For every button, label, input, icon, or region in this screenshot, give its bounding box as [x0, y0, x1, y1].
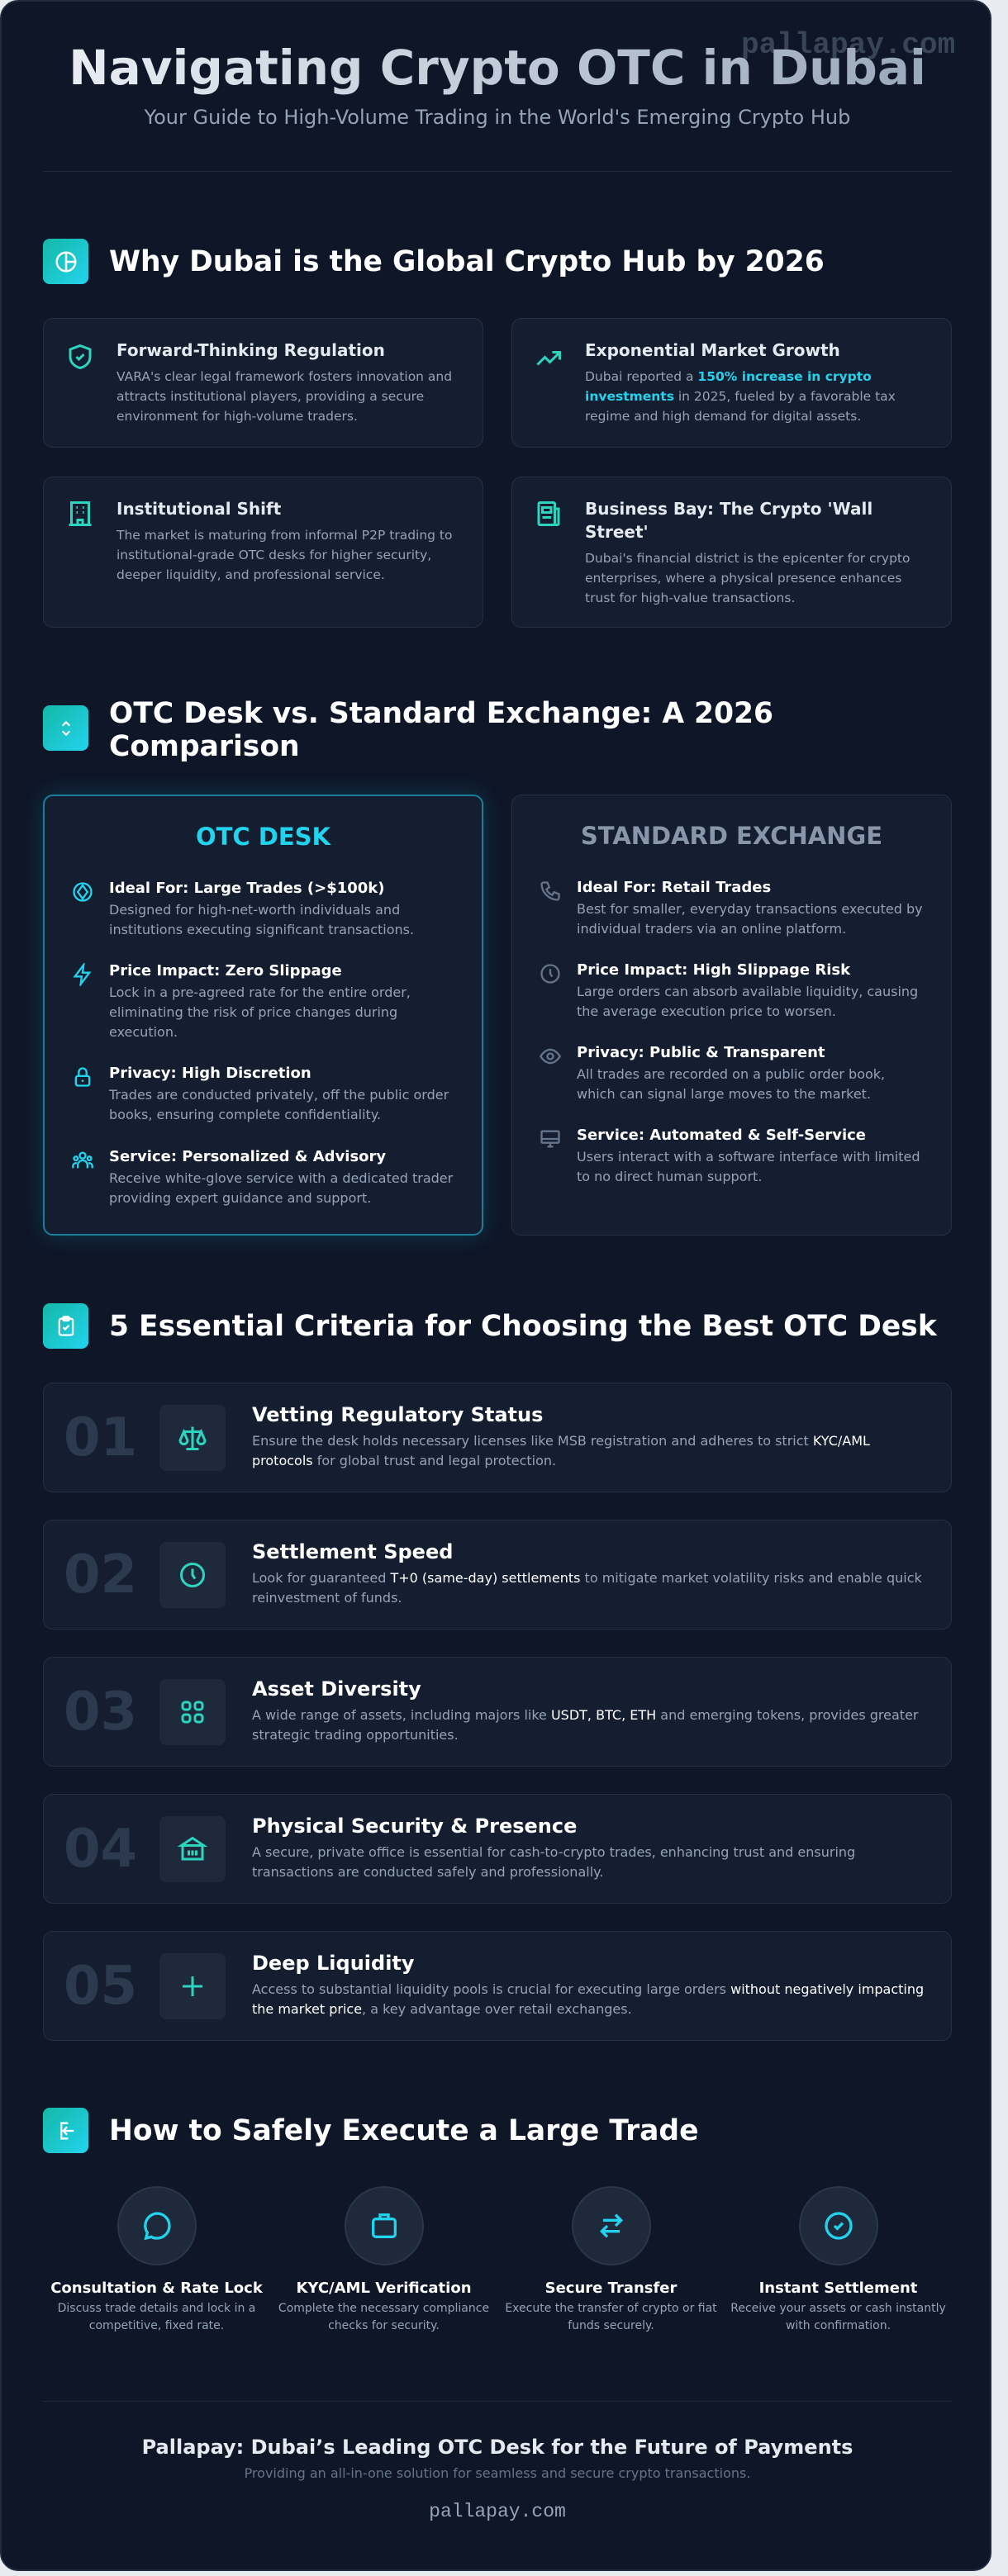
item: price: Price Impact: Zero Slippage — [109, 962, 342, 980]
item: privacy: Privacy: High Discretion — [109, 1065, 311, 1082]
card: institutional: The market is maturing from informal P2P trading to institutional-grade OTC desks for higher security, deeper liquidity, and professional service. — [116, 528, 453, 582]
criterion 01 — [43, 1383, 952, 1492]
section 2 heading: OTC Desk vs. Standard Exchange: A 2026 — [109, 697, 773, 730]
title: Navigating Crypto OTC in Dubai — [69, 40, 926, 96]
section 1 heading: Why Dubai is the Global Crypto Hub by 2026 — [109, 245, 825, 278]
card: institutional — [43, 477, 483, 628]
item: privacy: Privacy: Public & Transparent — [577, 1044, 825, 1061]
panel: standard exchange — [511, 795, 952, 1236]
card: business bay: Business Bay: The Crypto 'Wall Street' — [585, 499, 872, 542]
card: growth: Exponential Market Growth — [585, 340, 840, 360]
step 2: Complete the necessary compliance checks for security. — [278, 2302, 489, 2332]
item: ideal for: Ideal For: Large Trades (>$100k) — [109, 880, 385, 897]
criterion 02: Settlement Speed — [252, 1540, 453, 1563]
criterion 03: Asset Diversity — [252, 1677, 421, 1701]
item: privacy — [74, 1065, 449, 1122]
icon: trend — [537, 351, 561, 365]
icon: login — [43, 2108, 88, 2153]
item: price — [73, 962, 411, 1040]
item: price: Large orders can absorb available liquidity, causing the average execution price to worsen. — [577, 984, 918, 1019]
item: service: Receive white-glove service with a dedicated trader providing expert guidance and support. — [109, 1170, 453, 1206]
footer: pallapay.com — [429, 2501, 566, 2522]
item: service: Service: Automated & Self-Service — [577, 1127, 866, 1144]
criterion 02 — [43, 1520, 952, 1630]
section 3 heading: 5 Essential Criteria for Choosing the Best OTC Desk — [109, 1310, 937, 1343]
icon: scale — [159, 1405, 226, 1471]
step 1: Consultation & Rate Lock — [50, 2279, 263, 2297]
footer — [142, 2436, 853, 2522]
item: ideal for: Designed for high-net-worth individuals and institutions executing significant transactions. — [109, 902, 414, 937]
item: privacy: All trades are recorded on a public order book, — [577, 1066, 885, 1082]
panel: OTC desk: OTC DESK — [196, 823, 330, 851]
item: privacy: Trades are conducted privately, off the public order books, ensuring complete confidentiality. — [109, 1087, 449, 1122]
criterion 04: 04 — [64, 1819, 137, 1880]
card: growth: Dubai reported a 150% increase in crypto investments in 2025, fueled by a favorable tax regime and high demand for digital assets. — [585, 369, 896, 424]
step 2: KYC/AML Verification — [296, 2279, 472, 2297]
icon: grid — [159, 1679, 226, 1745]
card: business bay — [511, 477, 952, 628]
section 2 heading: Comparison — [109, 730, 300, 763]
panel: OTC desk — [43, 795, 483, 1236]
card: business bay: Dubai's financial district is the epicenter for crypto enterprises, where a physical presence enhances — [585, 551, 911, 586]
footer: Providing an all-in-one solution for seamless and secure crypto transactions. — [245, 2465, 750, 2481]
criterion 05: Access to substantial liquidity pools is crucial for executing large orders without negatively impacting the market price, a key advantage over retail exchanges. — [252, 1981, 924, 2017]
item: ideal for: Best for smaller, everyday transactions executed by individual traders via an online platform. — [577, 901, 923, 937]
card: growth — [511, 318, 952, 448]
icon: briefcase — [344, 2186, 423, 2265]
icon: newspaper — [537, 501, 560, 526]
icon: clock — [159, 1542, 226, 1608]
watermark: pallapay.com — [741, 28, 955, 62]
item: service: Users interact with a software interface with limited to no direct human support. — [577, 1149, 920, 1184]
criterion 03 — [43, 1657, 952, 1767]
item: price: Lock in a pre-agreed rate for the entire order, eliminating the risk of price changes during execution. — [109, 984, 411, 1040]
criterion 05 — [43, 1931, 952, 2041]
step 3: Execute the transfer of crypto or fiat funds securely. — [505, 2302, 717, 2332]
item: privacy — [540, 1044, 885, 1102]
criterion 05: 05 — [64, 1956, 137, 2017]
step 3: Secure Transfer — [545, 2279, 677, 2297]
step 4 — [730, 2186, 946, 2332]
icon: plus — [159, 1953, 226, 2019]
panel: standard exchange: STANDARD EXCHANGE — [581, 822, 882, 850]
criterion 01: Vetting Regulatory Status — [252, 1403, 543, 1426]
card: regulation — [43, 318, 483, 448]
criterion 04 — [43, 1794, 952, 1904]
criterion 02: 02 — [64, 1544, 137, 1606]
section 4 heading — [43, 2108, 698, 2153]
step 1: Discuss trade details and lock in a competitive, fixed rate. — [58, 2302, 255, 2332]
card: regulation: Forward-Thinking Regulation — [116, 340, 385, 360]
icon: chevrons — [43, 705, 88, 751]
step 2 — [278, 2186, 489, 2332]
item: ideal for — [540, 879, 923, 937]
step 4: Receive your assets or cash instantly with confirmation. — [730, 2302, 946, 2332]
criterion 04: A secure, private office is essential for cash-to-crypto trades, enhancing trust and ensuring transactions are conducted safely and professionally. — [252, 1844, 855, 1880]
criterion 04: Physical Security & Presence — [252, 1815, 577, 1838]
item: price — [540, 961, 918, 1019]
criterion 01: 01 — [64, 1407, 137, 1468]
criterion 01: Ensure the desk holds necessary licenses like MSB registration and adheres to strict KYC/AML protocols for global trust and legal protection. — [252, 1433, 870, 1468]
step 3 — [505, 2186, 717, 2332]
step 4: Instant Settlement — [759, 2279, 917, 2297]
icon: shield — [69, 344, 91, 369]
criterion 05: Deep Liquidity — [252, 1952, 415, 1975]
icon: pie — [43, 239, 88, 284]
section 3 heading — [43, 1303, 937, 1349]
card: institutional: Institutional Shift — [116, 499, 281, 519]
icon: transfer — [572, 2186, 651, 2265]
item: service: Service: Personalized & Advisory — [109, 1148, 386, 1165]
icon: bank — [159, 1816, 226, 1882]
icon: clipboard — [43, 1303, 88, 1349]
item: ideal for — [73, 880, 414, 937]
criterion 03: A wide range of assets, including majors like USDT, BTC, ETH and emerging tokens, provides greater strategic trading opportunities. — [252, 1707, 918, 1743]
item: service — [540, 1127, 920, 1184]
section 1 heading — [43, 239, 825, 284]
step 1 — [50, 2186, 263, 2332]
footer: Pallapay: Dubai’s Leading OTC Desk for the Future of Payments — [142, 2436, 853, 2459]
criterion 03: 03 — [64, 1682, 137, 1743]
section 4 heading: How to Safely Execute a Large Trade — [109, 2114, 698, 2147]
icon: chat — [117, 2186, 197, 2265]
card: business bay: trust for high-value transactions. — [585, 591, 795, 605]
icon: building — [69, 501, 91, 526]
card: regulation: VARA's clear legal framework fosters innovation and attracts institutional players, providing a secure environment for high-volume traders. — [116, 369, 452, 424]
section 2 heading — [43, 697, 773, 763]
item: service — [72, 1148, 453, 1206]
icon: check — [798, 2186, 877, 2265]
item: privacy: which can signal large moves to the market. — [577, 1086, 871, 1102]
subtitle: Your Guide to High-Volume Trading in the World's Emerging Crypto Hub — [145, 106, 850, 129]
item: ideal for: Ideal For: Retail Trades — [577, 879, 771, 896]
criterion 02: Look for guaranteed T+0 (same-day) settlements to mitigate market volatility risks and enable quick reinvestment of funds. — [252, 1570, 922, 1606]
item: price: Price Impact: High Slippage Risk — [577, 961, 850, 979]
